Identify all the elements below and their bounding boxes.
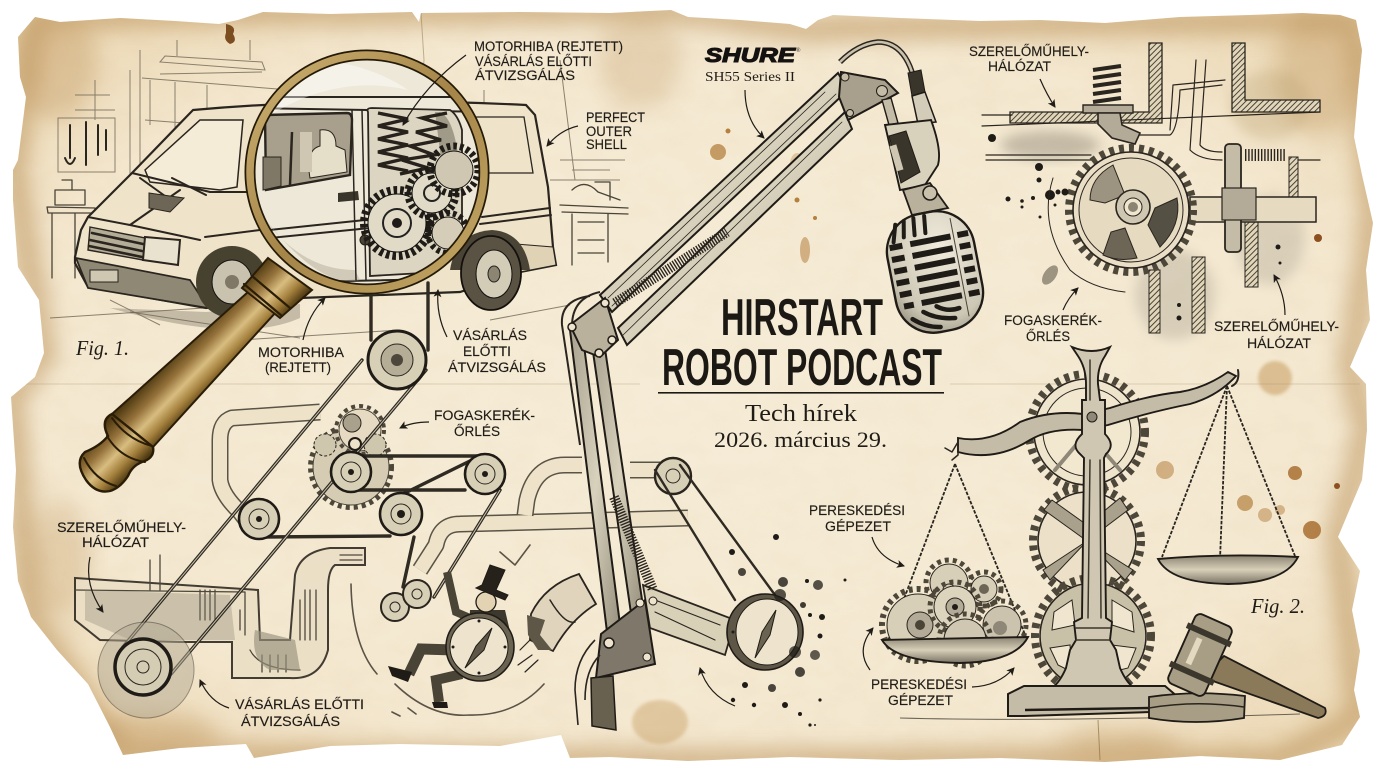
ink splatter on gear xyxy=(988,134,1282,320)
balance beam xyxy=(958,372,1236,455)
label: szereloműhely halozat top right xyxy=(969,44,1089,107)
base bracket xyxy=(596,600,655,678)
right pan xyxy=(1158,555,1298,584)
subtitle: Tech hírek and date xyxy=(714,401,887,452)
label: vasarlas elotti atvizsgalas bottom: VÁSÁRLÁS ELŐTTI xyxy=(235,697,364,712)
label: perfect outer shell: OUTER xyxy=(586,124,632,139)
label: szereloműhely halozat top right: HÁLÓZAT xyxy=(988,59,1051,74)
boom spring xyxy=(615,232,727,303)
label: vasarlas elotti atvizsgalas upper: ÁTVIZSGÁLÁS xyxy=(448,360,546,375)
label: vasarlas elotti atvizsgalas upper: ELŐTTI xyxy=(463,344,511,359)
label: fig 2: Fig. 2. xyxy=(1250,594,1305,618)
label: vasarlas elotti atvizsgalas upper xyxy=(438,290,546,375)
label: motorhiba rejtett vasarlas elotti atvizsgalas: VÁSÁRLÁS ELŐTTI xyxy=(475,54,592,69)
background gear group xyxy=(311,406,391,507)
label: szereloműhely halozat right xyxy=(1214,275,1339,351)
label: motorhiba rejtett lower xyxy=(258,298,344,375)
illustration: scales of justice with gears xyxy=(882,347,1326,722)
upper arm rails xyxy=(600,73,848,312)
illustration: pipes and gear network lower left xyxy=(75,283,691,718)
label: pereskedesi gepezet upper: PERESKEDÉSI xyxy=(809,503,905,518)
label: szereloműhely halozat left: SZERELŐMŰHELY- xyxy=(57,520,186,535)
label: fogaskerek orles right: FOGASKERÉK- xyxy=(1004,313,1102,328)
label: vasarlas elotti atvizsgalas bottom xyxy=(200,680,364,729)
subtitle: Tech hírek and date: Tech hírek xyxy=(745,401,857,427)
hatched L pipes xyxy=(1010,43,1162,123)
label: szereloműhely halozat right: HÁLÓZAT xyxy=(1247,336,1311,351)
label: pereskedesi gepezet lower xyxy=(863,628,1014,708)
arrow: logo to boom xyxy=(745,90,764,138)
illustration: van with workshop floor xyxy=(75,101,570,340)
front wheel xyxy=(196,246,268,318)
label: szereloműhely halozat top right: SZERELŐMŰHELY- xyxy=(969,44,1089,59)
label: fogaskerek orles middle: FOGASKERÉK- xyxy=(434,408,535,423)
lower arm rails xyxy=(570,330,622,640)
scale base xyxy=(1008,686,1178,716)
title: Hirstart Robot Podcast: HIRSTART xyxy=(721,289,883,347)
label: motorhiba rejtett vasarlas elotti atvizsgalas: MOTORHIBA (REJTETT) xyxy=(474,39,623,54)
illustration: microphone boom arm xyxy=(562,42,936,730)
illustration: workshop background sketch xyxy=(47,40,628,318)
scale column xyxy=(1052,347,1134,688)
title: Hirstart Robot Podcast: ROBOT PODCAST xyxy=(662,339,942,397)
belts xyxy=(123,283,500,674)
arrow: curved gauge arrow xyxy=(700,668,735,706)
label: vasarlas elotti atvizsgalas upper: VÁSÁRLÁS xyxy=(453,328,527,343)
label: pereskedesi gepezet lower: PERESKEDÉSI xyxy=(871,677,967,692)
label: motorhiba rejtett lower: MOTORHIBA xyxy=(258,345,344,360)
label: szereloműhely halozat right: SZERELŐMŰHELY- xyxy=(1214,319,1339,334)
left pan xyxy=(882,637,1028,663)
illustration: right gear and hatched pipes mechanism xyxy=(982,43,1320,340)
label: motorhiba rejtett vasarlas elotti atvizsgalas xyxy=(403,39,623,125)
label: perfect outer shell xyxy=(547,110,645,152)
coffee stains xyxy=(225,24,1340,539)
illustration: gauge pipe with ink splatter xyxy=(643,465,846,727)
label: fogaskerek orles middle xyxy=(400,408,535,439)
elbow bracket xyxy=(570,298,618,357)
icon: gavel xyxy=(1149,611,1326,722)
label: fogaskerek orles right xyxy=(1004,288,1102,344)
spring xyxy=(1093,66,1121,102)
label: fogaskerek orles middle: ŐRLÉS xyxy=(454,424,500,439)
label: pereskedesi gepezet upper xyxy=(809,503,905,566)
logo: Shure SH55 Series II: ® xyxy=(796,47,801,54)
label: fogaskerek orles right: ŐRLÉS xyxy=(1026,329,1070,344)
label: motorhiba rejtett vasarlas elotti atvizsgalas: ÁTVIZSGÁLÁS xyxy=(475,68,575,83)
logo: Shure SH55 Series II: SHURE xyxy=(705,45,796,67)
label: fig 1: Fig. 1. xyxy=(75,336,129,360)
label: perfect outer shell: PERFECT xyxy=(586,110,645,125)
left pan chains xyxy=(888,464,1026,641)
label: szereloműhely halozat left xyxy=(57,520,186,612)
microphone cable xyxy=(840,42,912,72)
illustration: magnifying glass handle xyxy=(80,258,312,492)
label: szereloműhely halozat left: HÁLÓZAT xyxy=(82,535,149,550)
illustration: compass runner character xyxy=(351,545,596,716)
label: pereskedesi gepezet upper: GÉPEZET xyxy=(825,519,891,534)
title: Hirstart Robot Podcast xyxy=(658,289,944,397)
label: vasarlas elotti atvizsgalas bottom: ÁTVIZSGÁLÁS xyxy=(241,714,340,729)
subtitle: Tech hírek and date: 2026. március 29. xyxy=(714,427,887,452)
pulley wheels xyxy=(98,331,691,718)
logo: Shure SH55 Series II: SH55 Series II xyxy=(705,70,795,85)
scale gears xyxy=(1029,374,1151,694)
right pan chains xyxy=(1162,386,1295,559)
label: pereskedesi gepezet lower: GÉPEZET xyxy=(888,693,953,708)
label: motorhiba rejtett lower: (REJTETT) xyxy=(265,360,331,375)
illustration: magnifying lens with van interior xyxy=(250,55,490,289)
van body xyxy=(75,101,556,308)
top bracket xyxy=(839,72,898,120)
logo: Shure SH55 Series II xyxy=(705,45,801,85)
icon: wrenches on wall xyxy=(65,122,106,165)
gears in left pan xyxy=(882,560,1026,666)
rear wheel xyxy=(450,230,530,310)
label: perfect outer shell: SHELL xyxy=(586,137,627,152)
ink splatter xyxy=(729,534,846,727)
icon: microphone xyxy=(880,98,990,339)
